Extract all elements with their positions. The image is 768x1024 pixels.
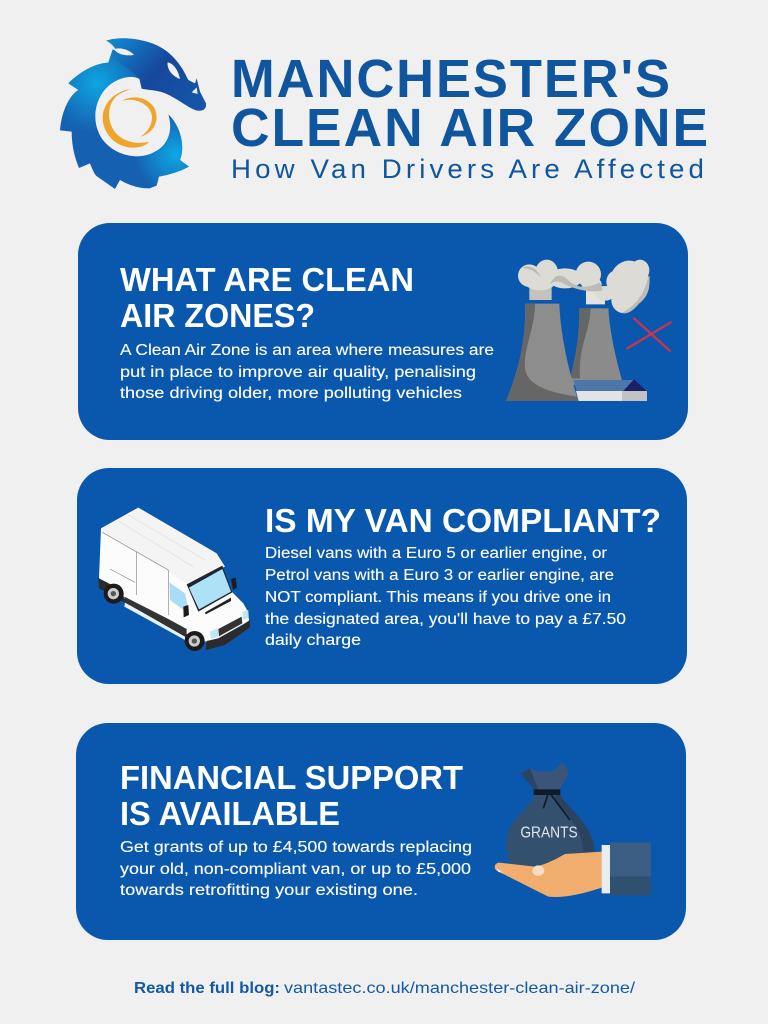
- heading: what are clean air zones: AIR ZONES?: [120, 298, 315, 335]
- text: definition: put in place to improve air quality, penalising: [120, 364, 476, 381]
- van wheels: [104, 584, 205, 651]
- icon: power station cooling towers: [506, 260, 671, 401]
- text: compliance rules: Petrol vans with a Euro 3 or earlier engine, are: [265, 567, 614, 584]
- footer: blog link: vantastec.co.uk/manchester-clean-air-zone/: [284, 980, 636, 997]
- bag label: GRANTS: [520, 824, 578, 841]
- heading: what are clean air zones: WHAT ARE CLEAN: [120, 262, 414, 299]
- text: grants: your old, non-compliant van, or up to £5,000: [120, 861, 471, 878]
- text: definition: those driving older, more polluting vehicles: [120, 385, 462, 402]
- footer: blog link: Read the full blog:: [134, 980, 280, 997]
- panel: is my van compliant: [77, 468, 687, 684]
- icon: white van: [98, 508, 250, 651]
- heading: what are clean air zones: [120, 262, 414, 335]
- icon: red cross: [627, 318, 671, 351]
- logo: dragon saw blade: [57, 38, 206, 190]
- title: [231, 49, 710, 158]
- panel: what are clean air zones: [78, 223, 688, 440]
- subtitle: How Van Drivers Are Affected: [231, 154, 708, 184]
- icon: grants bag on hand: [495, 763, 651, 897]
- text: compliance rules: daily charge: [265, 632, 361, 649]
- text: compliance rules: [265, 545, 626, 649]
- text: compliance rules: the designated area, you'll have to pay a £7.50: [265, 611, 626, 628]
- text: definition: [120, 342, 494, 402]
- heading: financial support: FINANCIAL SUPPORT: [120, 760, 464, 797]
- text: compliance rules: NOT compliant. This means if you drive one in: [265, 589, 611, 606]
- text: grants: [120, 839, 472, 899]
- heading: is my van compliant: IS MY VAN COMPLIANT?: [265, 503, 661, 540]
- footer: blog link: [134, 980, 636, 997]
- heading: financial support: [120, 760, 464, 833]
- panel: financial support: [76, 723, 686, 940]
- text: compliance rules: Diesel vans with a Euro 5 or earlier engine, or: [265, 545, 607, 562]
- heading: financial support: IS AVAILABLE: [120, 796, 340, 833]
- title: CLEAN AIR ZONE: [231, 98, 710, 158]
- title: MANCHESTER'S: [231, 49, 672, 109]
- text: grants: towards retrofitting your existing one.: [120, 882, 418, 899]
- text: definition: A Clean Air Zone is an area where measures are: [120, 342, 494, 359]
- text: grants: Get grants of up to £4,500 towards replacing: [120, 839, 472, 856]
